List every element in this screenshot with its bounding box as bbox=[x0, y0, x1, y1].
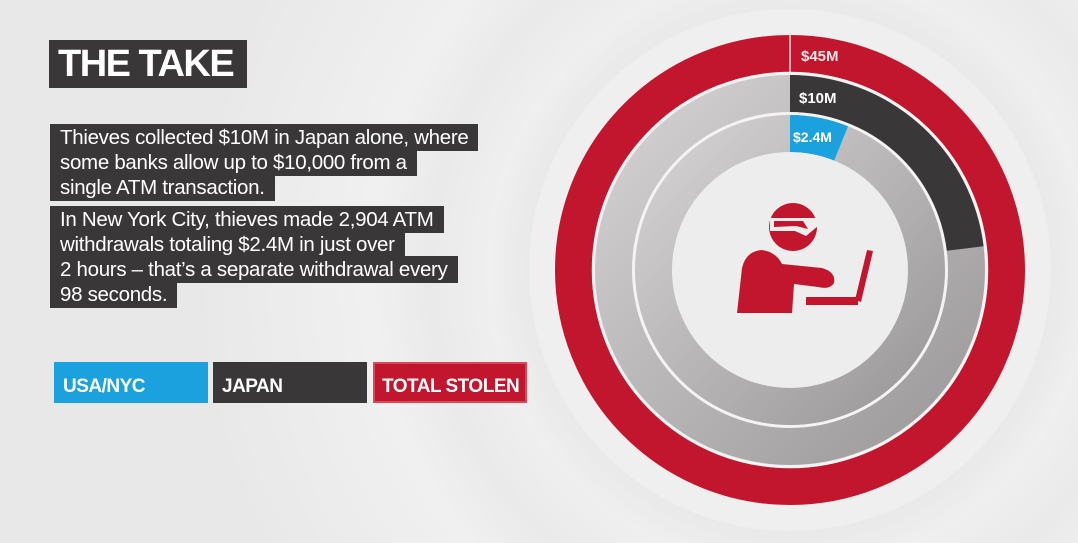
ring: USA/NYC bbox=[654, 133, 926, 406]
text block: Japan: single ATM transaction. bbox=[60, 176, 265, 199]
legend: USA/NYC bbox=[54, 362, 208, 403]
text block: New York: withdrawals totaling $2.4M in just over bbox=[60, 233, 395, 256]
ring: total stolen bbox=[574, 33, 1006, 486]
legend: total stolen: TOTAL STOLEN bbox=[382, 376, 519, 397]
text block: New York: In New York City, thieves made 2,904 ATM bbox=[60, 208, 434, 231]
icon: hacker at laptop bbox=[737, 203, 873, 313]
text block: New York bbox=[50, 206, 458, 308]
legend: Japan bbox=[213, 362, 367, 403]
label $10M: $10M bbox=[799, 90, 837, 107]
text block: New York: 98 seconds. bbox=[60, 283, 167, 306]
title: THE TAKE bbox=[58, 43, 233, 85]
text block: Japan bbox=[50, 124, 478, 201]
label $2.4M: $2.4M bbox=[793, 129, 832, 145]
label $45M: $45M bbox=[801, 48, 839, 65]
text block: Japan: some banks allow up to $10,000 from a bbox=[60, 151, 407, 174]
ring: Japan bbox=[614, 94, 966, 446]
text block: Japan: Thieves collected $10M in Japan alone, where bbox=[60, 126, 468, 149]
text block: New York: 2 hours – that’s a separate withdrawal every bbox=[60, 258, 448, 281]
legend: Japan: JAPAN bbox=[222, 376, 282, 397]
legend: total stolen bbox=[373, 362, 527, 403]
legend: USA/NYC: USA/NYC bbox=[63, 376, 145, 397]
